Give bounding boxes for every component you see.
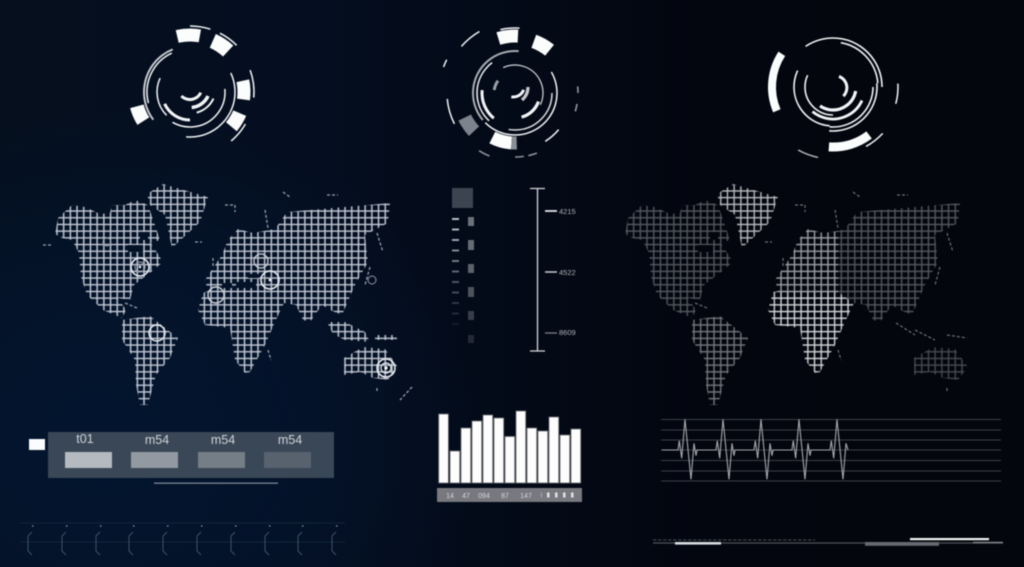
vertical scale: [530, 188, 576, 351]
panel labels: m54: [145, 433, 169, 447]
marker: west africa: [208, 287, 224, 303]
scale ticks: [545, 210, 557, 212]
white marker: [29, 439, 45, 450]
marker: japan: [368, 276, 376, 284]
marker: australia: [377, 359, 395, 377]
meter dashes: [452, 218, 459, 325]
radial gauge: right: [737, 0, 929, 183]
panel swatches: [65, 452, 311, 468]
ecg chart: [661, 419, 1001, 481]
marker: south america: [149, 325, 165, 341]
panel labels: m54: [278, 433, 302, 447]
chart labels: 147: [520, 493, 532, 500]
bottom left bracket ruler: [20, 523, 345, 555]
scale labels: 8609: [559, 328, 576, 337]
chart labels: [446, 493, 532, 500]
europe: [773, 229, 838, 292]
marker: north america small: [103, 238, 111, 246]
marker: middle east: [261, 271, 279, 289]
panel labels: m54: [211, 433, 235, 447]
gauge thick arcs: [749, 3, 917, 171]
meter square: [452, 188, 473, 208]
panel background: [48, 432, 334, 478]
gauge arcs: [101, 3, 279, 181]
australia: [914, 347, 968, 380]
bottom right timeline: [653, 538, 1003, 546]
panel labels: [76, 432, 302, 447]
panel labels: t01: [76, 432, 94, 446]
ecg grid: [661, 420, 1001, 481]
timeline dashes: [653, 539, 815, 541]
world map: right: [625, 184, 968, 405]
chart labels: 47: [462, 493, 470, 500]
radial gauge: left: [101, 3, 279, 181]
ruler dots: [32, 525, 338, 527]
ruler brackets: [28, 532, 336, 555]
gauge blocks: [114, 16, 266, 168]
asia: [838, 203, 960, 322]
islands: [695, 192, 967, 392]
chart label band: [437, 488, 582, 502]
scale beam: [530, 188, 545, 351]
marker: europe: [254, 254, 268, 268]
underline: [154, 482, 278, 484]
greenland: [717, 184, 778, 248]
bars: [439, 411, 581, 483]
chart labels: 094: [478, 493, 490, 500]
gauge blocks: [436, 14, 594, 172]
scale labels: 4215: [559, 207, 576, 216]
ecg trace: [662, 419, 848, 479]
africa: [768, 292, 854, 373]
chart small ticks: [541, 492, 574, 498]
meter blocks: [468, 217, 474, 343]
vertical level meter: [452, 188, 474, 343]
bar chart: [437, 411, 582, 502]
location markers: [103, 238, 395, 377]
gauge arcs: [415, 0, 615, 193]
timeline line: [653, 542, 1003, 544]
timeline segments: [675, 542, 721, 545]
chart labels: 87: [501, 493, 509, 500]
north america: [625, 200, 733, 318]
legend panel: [29, 432, 334, 484]
ruler lines: [20, 523, 345, 542]
scale labels: 4522: [559, 268, 576, 277]
south america: [692, 316, 748, 405]
marker: north america: [131, 258, 149, 276]
gauge arcs: [737, 0, 929, 183]
world map: left: [43, 184, 412, 405]
radial gauge: centre: [415, 0, 615, 193]
islands: [43, 192, 412, 400]
chart labels: 14: [446, 493, 454, 500]
scale labels: [559, 207, 576, 337]
continents: [55, 184, 398, 405]
